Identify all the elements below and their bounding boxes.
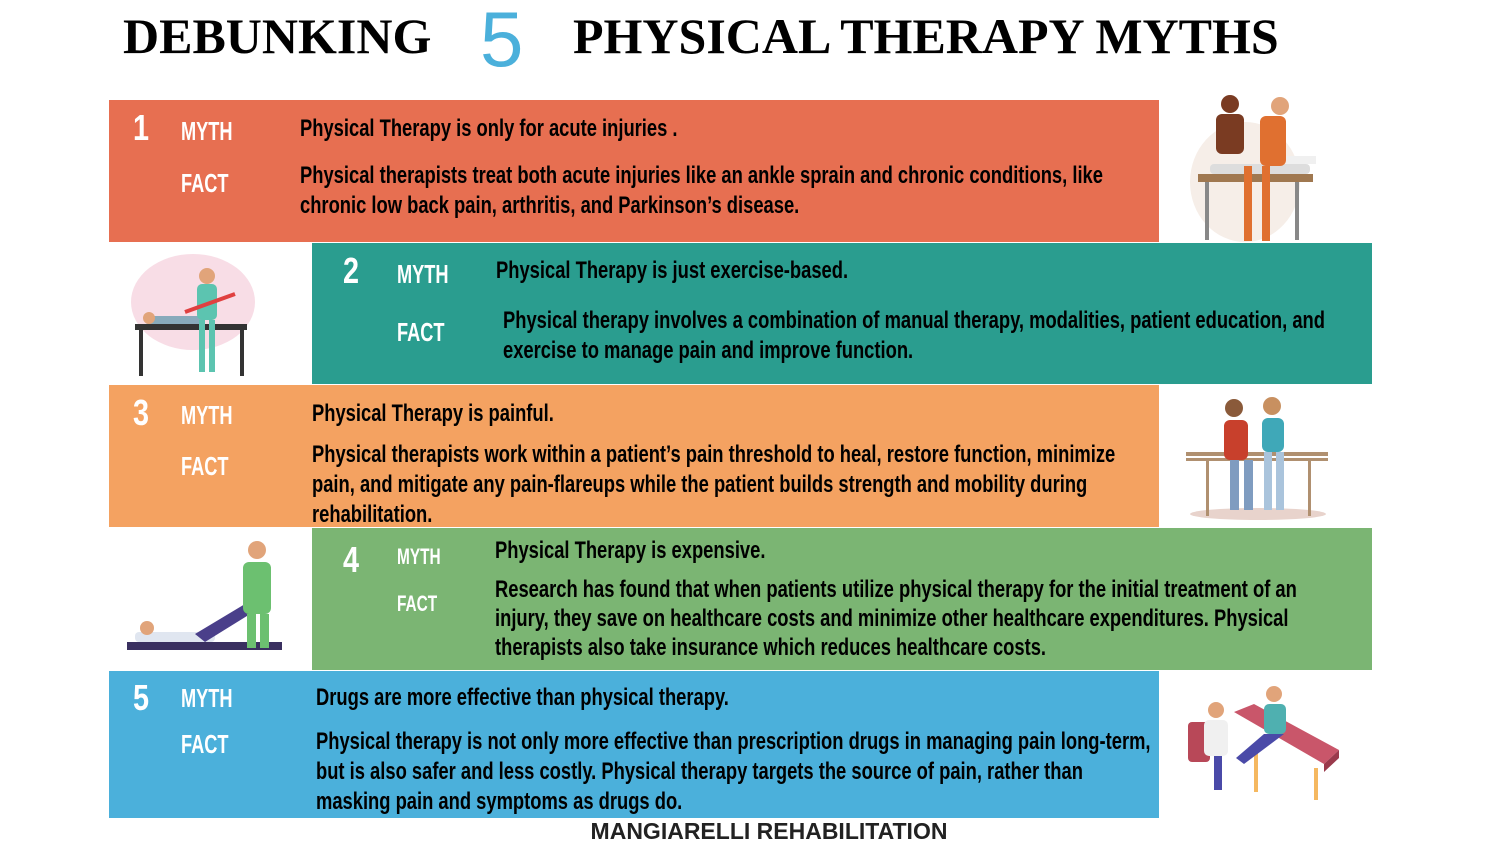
panel: myth 3: MYTH [181, 400, 233, 430]
panel: myth 5: 5 [133, 677, 149, 718]
panel: myth 4: Physical Therapy is expensive. [495, 537, 765, 564]
panel: myth 3: Physical therapists work within a patient’s pain threshold to heal, restore function, minimize [312, 441, 1115, 468]
panel: myth 2: MYTH [397, 259, 449, 289]
panel: myth 3 [109, 385, 1159, 527]
panel: myth 5: FACT [181, 729, 229, 759]
title [123, 0, 1279, 83]
panel: myth 1: FACT [181, 168, 229, 198]
illustration: therapist raising patient leg [127, 541, 282, 650]
footer: organization name: MANGIARELLI REHABILITATION [591, 818, 947, 844]
illustration: patient on table with therapist [131, 254, 255, 376]
illustration: walking with parallel bars [1186, 397, 1328, 520]
panel: myth 3: rehabilitation. [312, 501, 432, 528]
panel: myth 5: MYTH [181, 683, 233, 713]
panel: myth 5: masking pain and symptoms as drugs do. [316, 788, 682, 815]
panel: myth 3: 3 [133, 392, 149, 433]
panel: myth 1: MYTH [181, 116, 233, 146]
panel: myth 4: FACT [397, 591, 437, 616]
panel: myth 3: Physical Therapy is painful. [312, 400, 554, 427]
panel: myth 4: MYTH [397, 544, 441, 569]
panel: myth 2: 2 [343, 250, 359, 291]
title: PHYSICAL THERAPY MYTHS [573, 8, 1279, 64]
panel: myth 4: 4 [343, 539, 359, 580]
panel: myth 5: Physical therapy is not only more effective than prescription drugs in managing pain long-term, [316, 728, 1151, 755]
panel: myth 1: Physical Therapy is only for acute injuries . [300, 115, 678, 142]
panel: myth 3: FACT [181, 451, 229, 481]
panel: myth 5 [109, 671, 1159, 818]
panel: myth 2: Physical therapy involves a combination of manual therapy, modalities, patient education, and [503, 307, 1325, 334]
illustration: doctor examining patient on bench [1188, 686, 1339, 800]
panel: myth 1: 1 [133, 107, 149, 148]
panel: myth 3: pain, and mitigate any pain-flareups while the patient builds strength and mobility during [312, 471, 1087, 498]
panel: myth 2: exercise to manage pain and improve function. [503, 337, 913, 364]
panel: myth 4: Research has found that when patients utilize physical therapy for the initial treatment of an [495, 576, 1297, 603]
title: DEBUNKING [123, 8, 431, 64]
panel: myth 2 [312, 243, 1372, 384]
panel: myth 2: FACT [397, 317, 445, 347]
panel: myth 4: therapists also take insurance which reduces healthcare costs. [495, 634, 1046, 661]
panel: myth 4 [312, 528, 1372, 670]
panel: myth 4: injury, they save on healthcare costs and minimize other healthcare expenditures. Physical [495, 605, 1288, 632]
panel: myth 5: but is also safer and less costly. Physical therapy targets the source of pain, rather than [316, 758, 1083, 785]
panel: myth 1: chronic low back pain, arthritis, and Parkinson’s disease. [300, 192, 799, 219]
panel: myth 2: Physical Therapy is just exercise-based. [496, 257, 848, 284]
panel: myth 5: Drugs are more effective than physical therapy. [316, 684, 729, 711]
illustration: therapist stretching patient leg [1190, 95, 1316, 242]
panel: myth 1: Physical therapists treat both acute injuries like an ankle sprain and chronic conditions, like [300, 162, 1103, 189]
panel: myth 1 [109, 100, 1159, 242]
